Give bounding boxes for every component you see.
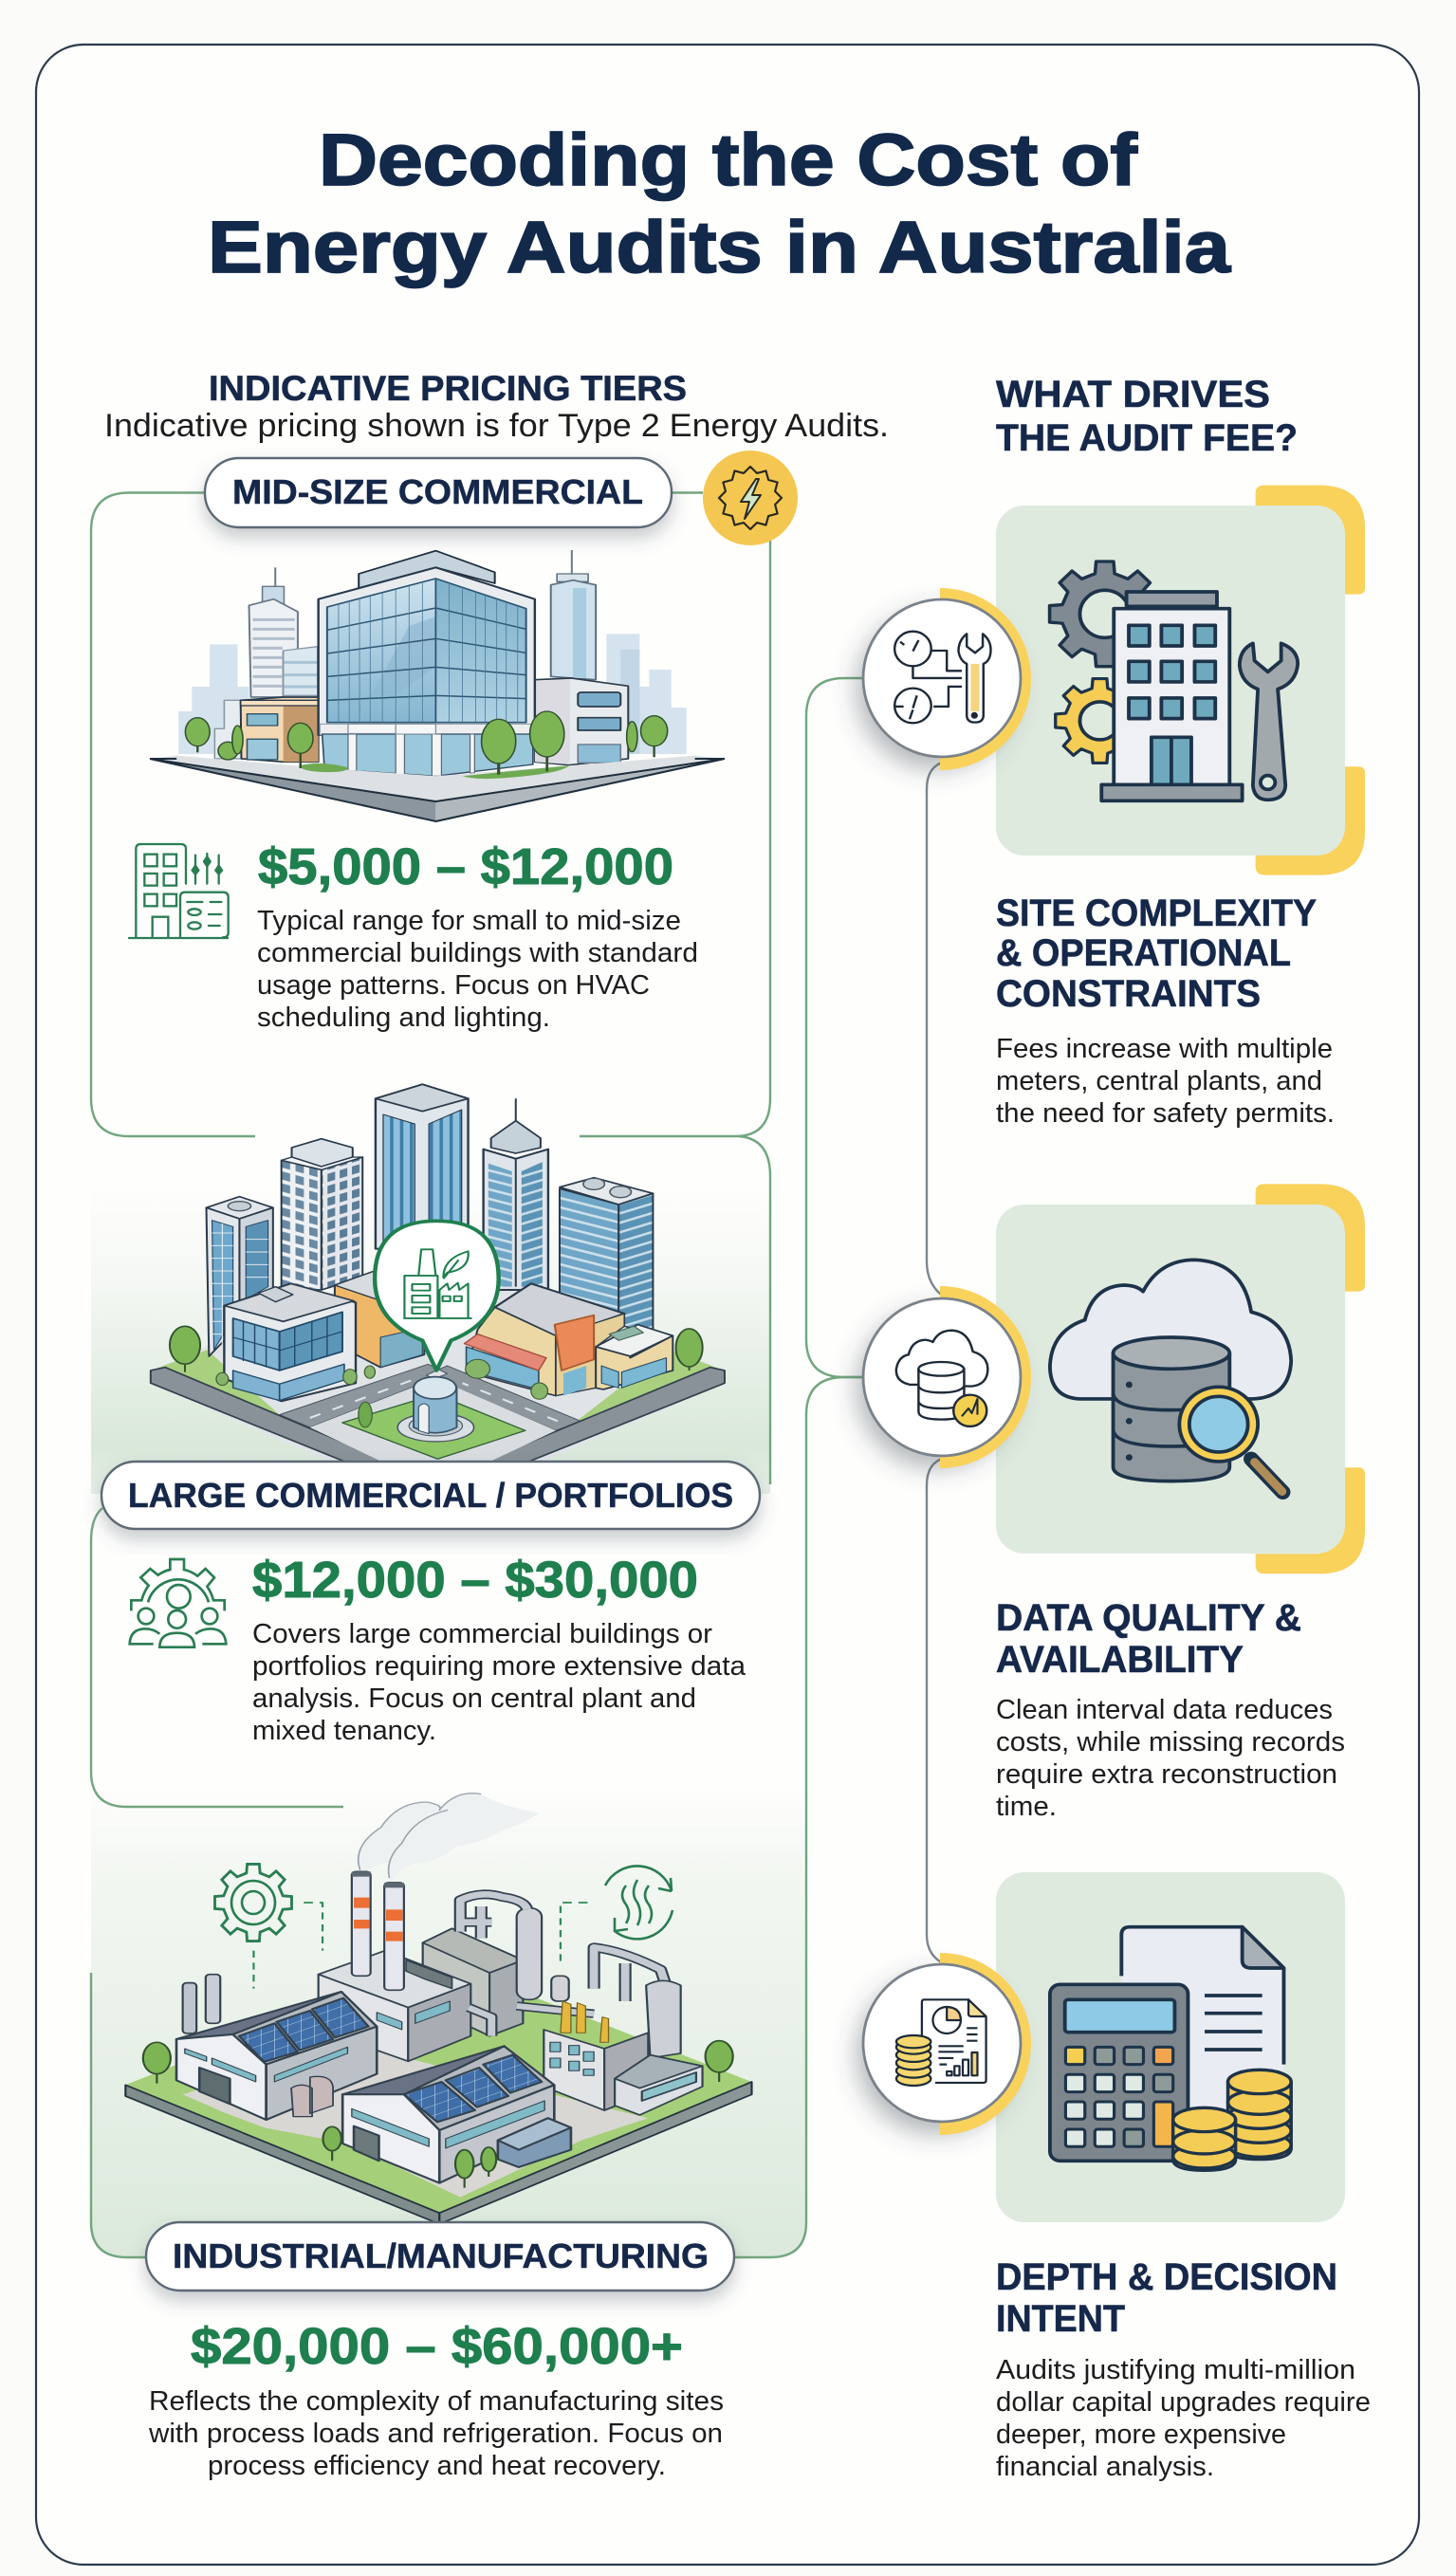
icon: energy badge bbox=[703, 451, 798, 545]
illustration: mid-size commercial building bbox=[150, 550, 725, 821]
icon: heat recovery bbox=[605, 1866, 673, 1939]
panel: site complexity bbox=[996, 486, 1365, 875]
description: large commercial: Covers large commercial buildings or bbox=[252, 1619, 712, 1649]
icon: building controls bbox=[129, 844, 229, 938]
description: industrial: process efficiency and heat recovery. bbox=[208, 2451, 666, 2481]
card: data quality bbox=[996, 1205, 1345, 1554]
panel: depth and decision intent bbox=[996, 1872, 1345, 2222]
pill: large commercial / portfolios: LARGE COMMERCIAL / PORTFOLIOS bbox=[128, 1476, 733, 1515]
icon: calculator document coins bbox=[1050, 1927, 1291, 2170]
text block: depth and decision: INTENT bbox=[996, 2298, 1125, 2340]
icon: report and coins bbox=[896, 1999, 986, 2086]
description: large commercial bbox=[252, 1619, 746, 1746]
connector lines: fee drivers bbox=[927, 762, 945, 1964]
subtitle note: Indicative pricing shown is for Type 2 Energy Audits. bbox=[104, 408, 889, 444]
description: large commercial: mixed tenancy. bbox=[252, 1716, 436, 1746]
title: Decoding the Cost of bbox=[319, 120, 1137, 201]
description: large commercial: portfolios requiring more extensive data bbox=[252, 1651, 746, 1682]
text block: site complexity: meters, central plants, and bbox=[996, 1066, 1322, 1096]
description: mid-size bbox=[257, 906, 698, 1033]
node: data quality bbox=[862, 1286, 1031, 1468]
text block: data quality: DATA QUALITY & bbox=[996, 1597, 1301, 1639]
card: depth and decision bbox=[996, 1872, 1345, 2222]
title: Energy Audits in Australia bbox=[208, 207, 1231, 288]
icon: gauges and wrench bbox=[894, 632, 990, 723]
text block: data quality: require extra reconstruction bbox=[996, 1759, 1337, 1790]
text block: data quality bbox=[996, 1597, 1345, 1822]
text block: site complexity bbox=[996, 892, 1335, 1129]
card: site complexity bbox=[996, 506, 1345, 856]
node: depth and decision bbox=[862, 1953, 1031, 2135]
icon: process gear bbox=[214, 1864, 292, 1941]
icon: cloud database bbox=[896, 1331, 987, 1426]
text block: depth and decision: Audits justifying multi-million bbox=[996, 2355, 1355, 2385]
text block: site complexity: & OPERATIONAL bbox=[996, 932, 1291, 974]
illustration: industrial plant bbox=[125, 1794, 751, 2224]
text block: depth and decision: deeper, more expensive bbox=[996, 2420, 1286, 2450]
price: mid-size: $5,000 – $12,000 bbox=[258, 838, 673, 895]
text block: depth and decision: dollar capital upgrades require bbox=[996, 2387, 1371, 2418]
description: mid-size: scheduling and lighting. bbox=[257, 1003, 550, 1033]
icon: cloud database with magnifier bbox=[1050, 1260, 1291, 1492]
pill: large commercial / portfolios bbox=[101, 1462, 760, 1529]
panel background: large commercial bbox=[91, 1186, 770, 1494]
icon: building with gears and wrench bbox=[1050, 561, 1298, 800]
text block: data quality: costs, while missing records bbox=[996, 1727, 1345, 1757]
description: industrial: Reflects the complexity of manufacturing sites bbox=[149, 2386, 724, 2417]
description: industrial bbox=[148, 2386, 724, 2481]
dashed callouts bbox=[253, 1903, 588, 1989]
yellow brackets: site complexity bbox=[1256, 486, 1365, 875]
heading: what drives the audit fee: THE AUDIT FEE? bbox=[996, 417, 1298, 459]
description: mid-size: usage patterns. Focus on HVAC bbox=[257, 970, 650, 1001]
text block: depth and decision bbox=[996, 2256, 1371, 2482]
title bbox=[208, 120, 1231, 288]
description: mid-size: commercial buildings with standard bbox=[257, 938, 698, 968]
heading: what drives the audit fee bbox=[996, 374, 1298, 459]
pill: industrial / manufacturing: INDUSTRIAL/MANUFACTURING bbox=[173, 2236, 709, 2275]
text block: site complexity: CONSTRAINTS bbox=[996, 973, 1261, 1015]
text block: large commercial bbox=[130, 1552, 746, 1746]
text block: data quality: Clean interval data reduces bbox=[996, 1695, 1333, 1725]
description: large commercial: analysis. Focus on central plant and bbox=[252, 1684, 696, 1714]
node: site complexity bbox=[862, 588, 1031, 770]
text block: depth and decision: DEPTH & DECISION bbox=[996, 2256, 1337, 2298]
icon: team and gear bbox=[130, 1559, 226, 1647]
text block: site complexity: Fees increase with multiple bbox=[996, 1034, 1333, 1064]
text block: site complexity: the need for safety permits. bbox=[996, 1098, 1335, 1129]
price: industrial: $20,000 – $60,000+ bbox=[191, 2318, 683, 2375]
description: mid-size: Typical range for small to mid-size bbox=[257, 906, 681, 936]
panel background: industrial bbox=[91, 1788, 806, 2257]
price: large commercial: $12,000 – $30,000 bbox=[252, 1552, 698, 1609]
pill: industrial / manufacturing bbox=[146, 2222, 734, 2291]
heading: indicative pricing tiers: INDICATIVE PRICING TIERS bbox=[209, 369, 687, 408]
pill: mid-size commercial bbox=[205, 458, 672, 527]
panel: data quality bbox=[996, 1184, 1365, 1573]
callout: location pin bbox=[375, 1221, 499, 1371]
text block: data quality: time. bbox=[996, 1792, 1057, 1822]
yellow brackets: data quality bbox=[1256, 1184, 1365, 1573]
description: industrial: with process loads and refrigeration. Focus on bbox=[148, 2419, 723, 2449]
heading: what drives the audit fee: WHAT DRIVES bbox=[996, 374, 1270, 415]
connector lines: pricing tiers bbox=[91, 493, 865, 2257]
illustration: large commercial city block bbox=[151, 1084, 725, 1470]
text block: depth and decision: financial analysis. bbox=[996, 2452, 1214, 2482]
text block: mid-size commercial bbox=[129, 838, 698, 1033]
pill: mid-size commercial: MID-SIZE COMMERCIAL bbox=[232, 472, 643, 511]
text block: data quality: AVAILABILITY bbox=[996, 1639, 1244, 1681]
text block: site complexity: SITE COMPLEXITY bbox=[996, 892, 1317, 934]
